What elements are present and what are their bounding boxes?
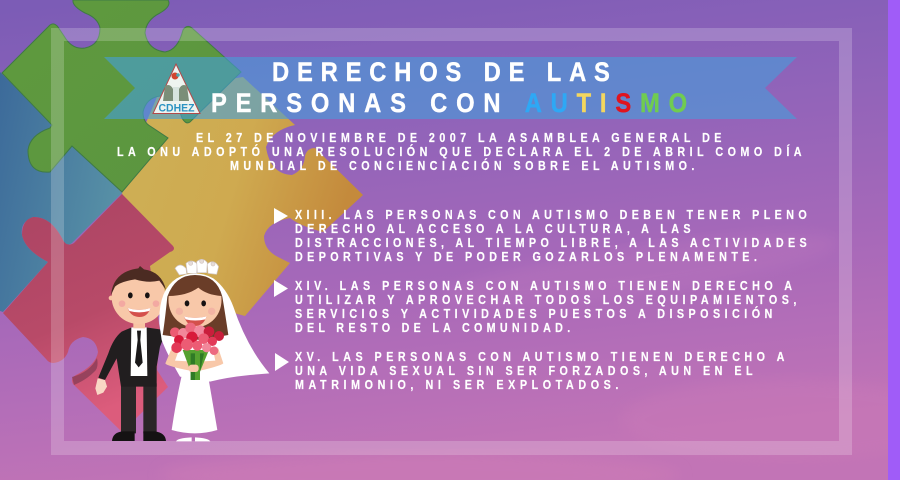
intro text: LA ONU ADOPTÓ UNA RESOLUCIÓN QUE DECLARA EL 2 DE ABRIL COMO DÍA	[117, 145, 802, 159]
groom head	[109, 266, 166, 328]
right XV	[275, 350, 785, 392]
groom legs and shoes	[121, 383, 157, 433]
bouquet stems	[183, 350, 209, 380]
puzzle piece: red	[3, 194, 174, 432]
puzzle piece: blue	[0, 72, 122, 312]
text XV	[295, 350, 785, 392]
text XV: XV. LAS PERSONAS CON AUTISMO TIENEN DERECHO A	[295, 350, 785, 364]
title	[211, 58, 687, 118]
title: PERSONAS CON AU TI S MO	[211, 89, 687, 118]
bouquet flowers	[170, 323, 224, 355]
bride face	[168, 288, 222, 327]
groom hand	[95, 378, 107, 395]
text XIV: DEL RESTO DE LA COMUNIDAD.	[295, 321, 570, 335]
right XIV	[274, 279, 796, 335]
text XV: UNA VIDA SEXUAL SIN SER FORZADOS, AUN EN EL	[295, 364, 753, 378]
couple illustration	[95, 259, 269, 441]
logo: CDHEZ	[153, 64, 200, 114]
puzzle	[0, 0, 363, 432]
translucent frame	[51, 28, 852, 455]
bride arms	[165, 348, 223, 371]
bride veil	[159, 273, 269, 382]
puzzle shadow: red notch	[72, 358, 98, 385]
text XIV: UTILIZAR Y APROVECHAR TODOS LOS EQUIPAMIENTOS,	[295, 293, 796, 307]
text XIII	[295, 208, 807, 264]
puzzle piece: green	[2, 0, 241, 192]
intro text: MUNDIAL DE CONCIENCIACIÓN SOBRE EL AUTISMO.	[230, 159, 694, 173]
text XIII: DISTRACCIONES, AL TIEMPO LIBRE, A LAS ACTIVIDADES	[295, 236, 807, 250]
text XIV: XIV. LAS PERSONAS CON AUTISMO TIENEN DERECHO A	[295, 279, 793, 293]
arrow XV	[275, 353, 289, 371]
logo: CDHEZ: CDHEZ	[158, 102, 195, 114]
arrow XIV	[274, 280, 288, 297]
text XIV	[295, 279, 796, 335]
text XIII: XIII. LAS PERSONAS CON AUTISMO DEBEN TENER PLENO	[295, 208, 807, 222]
right edge strip	[888, 0, 900, 480]
title ribbon	[104, 57, 797, 119]
intro text: EL 27 DE NOVIEMBRE DE 2007 LA ASAMBLEA GENERAL DE	[196, 131, 722, 145]
bride hair	[163, 275, 228, 340]
text XIII: DEPORTIVAS Y DE PODER GOZARLOS PLENAMENTE.	[295, 250, 757, 264]
right XIII	[274, 208, 807, 264]
groom	[95, 266, 166, 441]
text XV: MATRIMONIO, NI SER EXPLOTADOS.	[295, 378, 618, 392]
title: DERECHOS DE LAS	[272, 58, 610, 87]
groom shirt and tie	[131, 327, 147, 376]
bride	[159, 259, 269, 441]
bouquet hand	[189, 365, 199, 372]
arrow XIII	[274, 208, 288, 224]
intro text	[117, 131, 802, 173]
bride shoes	[176, 437, 210, 441]
text XIV: SERVICIOS Y ACTIVIDADES PUESTOS A DISPOSICIÓN	[295, 307, 772, 321]
text XIII: DERECHO AL ACCESO A LA CULTURA, A LAS	[295, 222, 691, 236]
puzzle piece: yellow	[122, 77, 363, 316]
groom jacket	[98, 327, 163, 387]
bride crown	[175, 259, 219, 275]
bride dress	[172, 352, 218, 433]
